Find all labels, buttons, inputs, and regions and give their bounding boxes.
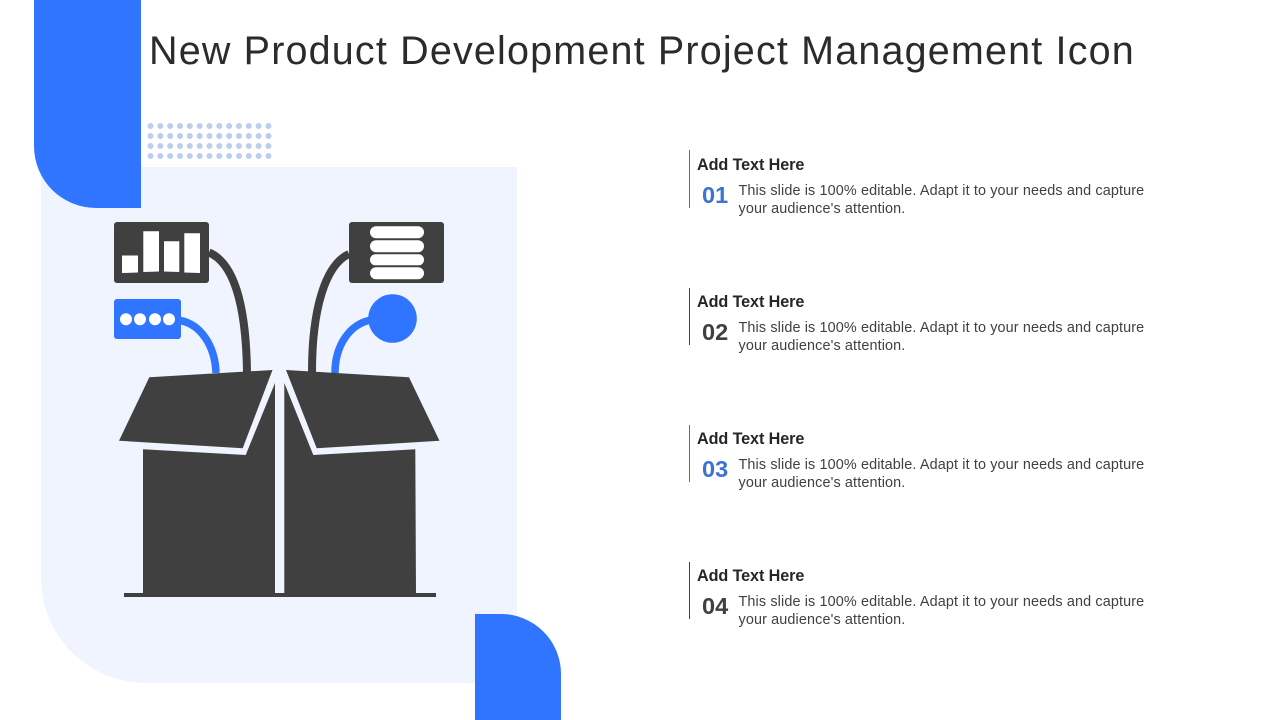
item 02 (689, 288, 1144, 354)
icon: bar chart card (114, 222, 209, 283)
item 02 description (738, 320, 1144, 354)
connector: list to box (312, 254, 349, 372)
item 04 description (738, 594, 1144, 628)
icon: list card (349, 222, 444, 283)
item 04 description: your audience's attention. (738, 612, 905, 628)
item 01 description (738, 183, 1144, 217)
item 04 number: 04 (702, 593, 728, 619)
item 01 heading: Add Text Here (697, 156, 804, 174)
item 03 number: 03 (702, 456, 728, 482)
item 04 (689, 562, 1144, 628)
icon: dots card (114, 299, 181, 339)
item 02 description: This slide is 100% editable. Adapt it to your needs and capture (738, 320, 1144, 336)
item 03 heading: Add Text Here (697, 430, 804, 448)
item 02 number: 02 (702, 319, 728, 345)
icon: cardboard box (119, 370, 440, 597)
connector: dots card to box (180, 320, 216, 373)
item 03 description: This slide is 100% editable. Adapt it to your needs and capture (738, 457, 1144, 473)
item 01 (689, 150, 1144, 217)
item 03 description: your audience's attention. (738, 475, 905, 491)
dot pattern (148, 123, 272, 159)
item 03 description (738, 457, 1144, 491)
panel: pale blue background (41, 167, 517, 683)
blue corner shape: top left (34, 0, 141, 208)
item 04 heading: Add Text Here (697, 567, 804, 585)
item 01 description: your audience's attention. (738, 201, 905, 217)
item 03 (689, 425, 1144, 491)
title: New Product Development Project Management Icon (149, 29, 1135, 73)
icon: blue circle (368, 294, 417, 343)
item 02 heading: Add Text Here (697, 293, 804, 311)
blue corner shape: bottom right (475, 614, 561, 720)
item 02 description: your audience's attention. (738, 338, 905, 354)
item 01 number: 01 (702, 182, 728, 208)
connector: chart to box (209, 252, 247, 372)
item 04 description: This slide is 100% editable. Adapt it to your needs and capture (738, 594, 1144, 610)
connector: circle to box (335, 320, 371, 373)
item 01 description: This slide is 100% editable. Adapt it to your needs and capture (738, 183, 1144, 199)
